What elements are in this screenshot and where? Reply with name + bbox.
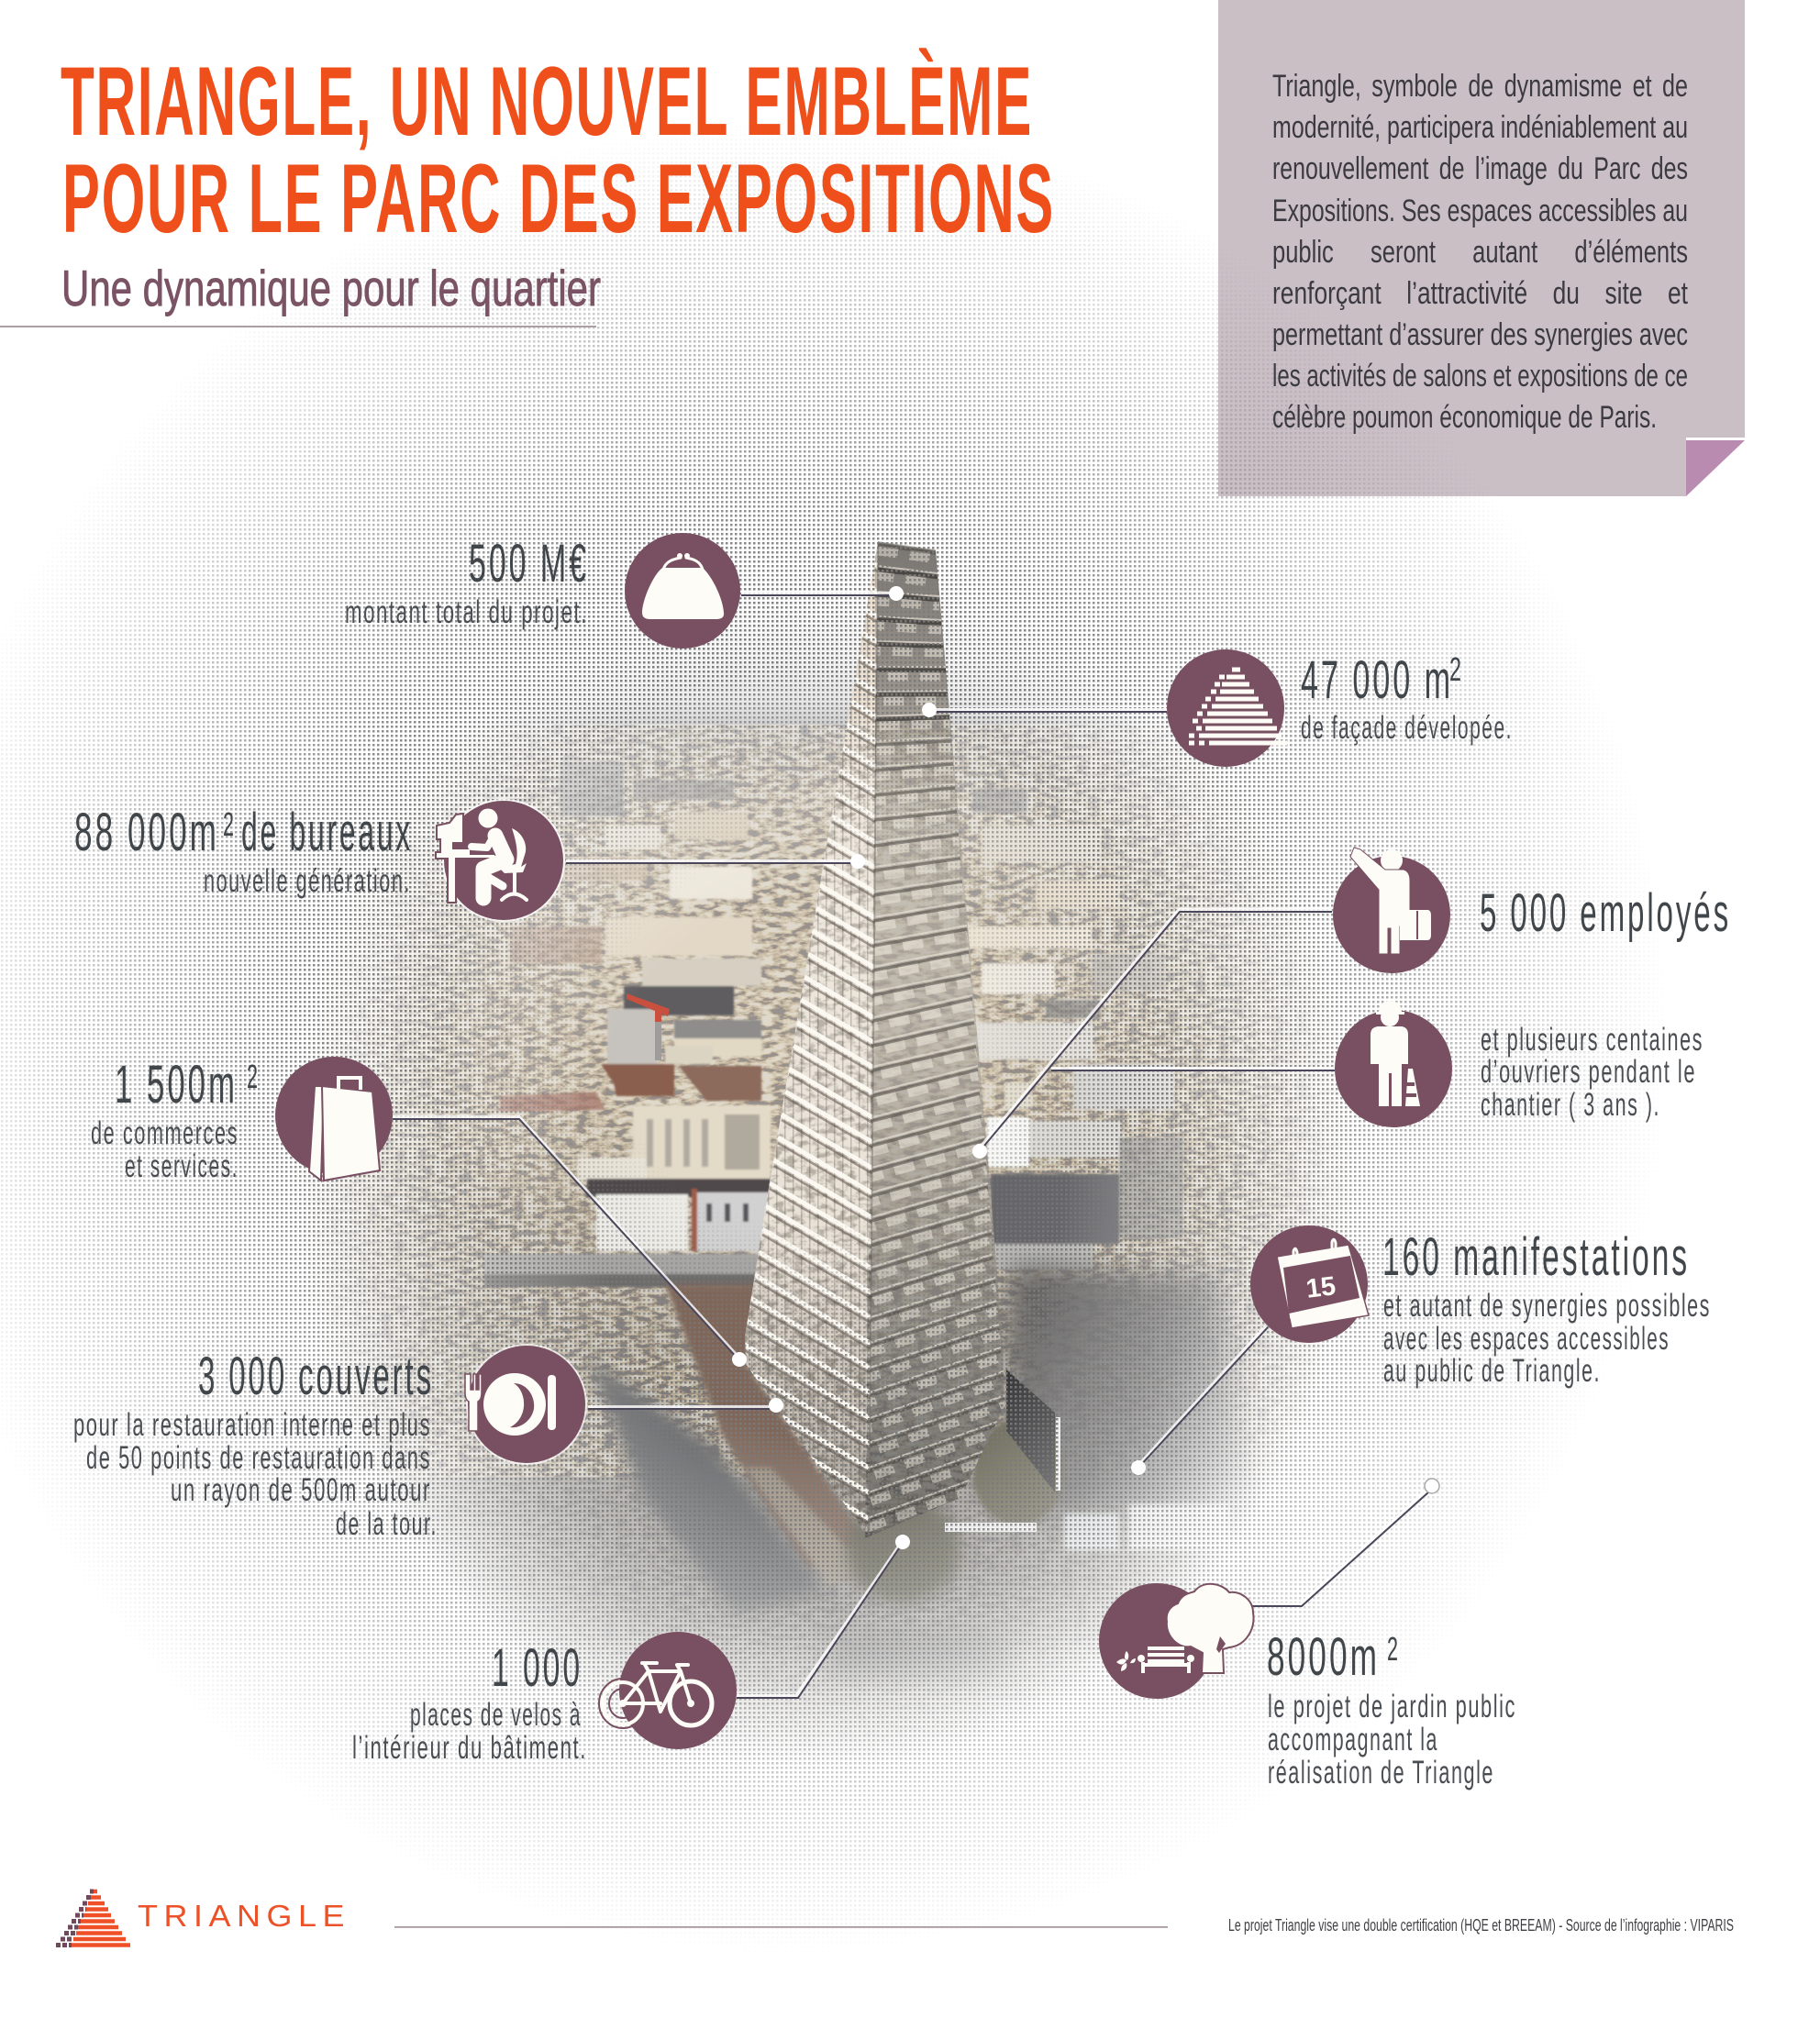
- panel text: introduction: Triangle, symbole de dynamisme et de: [1272, 69, 1688, 104]
- aerial photograph of the district: [312, 635, 1340, 1746]
- callout: 47 000 m2: 47 000 m: [1301, 650, 1453, 710]
- tower: Triangle facade: [745, 541, 1004, 1537]
- callout: 47 000 m2: [922, 649, 1513, 767]
- callout: 1 000 places de velos: l’intérieur du bâtiment.: [352, 1730, 587, 1766]
- icon: purse: [642, 553, 724, 619]
- callout: 1 500 m2 commerces: 2: [247, 1058, 258, 1095]
- subtitle: Une dynamique pour le quartier: [61, 260, 601, 316]
- callout: 8000 m2 jardin public: 8000m: [1267, 1627, 1380, 1687]
- callout: 500 M€: [345, 533, 904, 649]
- callout: 3 000 couverts: 3 000 couverts: [198, 1347, 434, 1406]
- icon: tower stripes: [1189, 670, 1287, 743]
- title: [61, 46, 1055, 253]
- title: POUR LE PARC DES EXPOSITIONS: [62, 143, 1055, 253]
- panel text: introduction: permettant d’assurer des synergies avec: [1272, 317, 1688, 352]
- icon: worker with cone: [1371, 1001, 1420, 1106]
- callout: 1 000 places de velos: places de velos à: [410, 1697, 582, 1733]
- callout: 1 500 m2 commerces: et services.: [125, 1148, 239, 1184]
- icon: person at desk: [436, 809, 527, 903]
- icon: calendar: [1277, 1239, 1369, 1328]
- panel text: introduction: public seront autant d’éléments: [1272, 235, 1688, 270]
- callout: 160 manifestations: au public de Triangle.: [1383, 1353, 1601, 1389]
- callout: 47 000 m2: de façade dévelopée.: [1301, 710, 1513, 746]
- icon: plate and cutlery: [465, 1373, 556, 1436]
- halftone dot screen: [1, 149, 1640, 1924]
- footer rule: [394, 1926, 1168, 1928]
- callout: 88 000 m2 de bureaux: [74, 799, 865, 922]
- logo: Triangle: [56, 1891, 350, 1945]
- construction crane: [627, 993, 670, 1060]
- callout: 88 000 m2 de bureaux: de bureaux: [241, 803, 413, 862]
- callout: 500 M€: 500 M€: [469, 534, 589, 593]
- icon: calendar: 15: [1304, 1271, 1337, 1304]
- callout: 8000 m2 jardin public: [1099, 1479, 1516, 1791]
- callout: 1 000 places de velos: [352, 1535, 910, 1766]
- callout: 3 000 couverts: de 50 points de restauration dans: [86, 1440, 431, 1476]
- callout: 8000 m2 jardin public: 2: [1387, 1630, 1398, 1668]
- callout: 3 000 couverts: un rayon de 500m autour: [171, 1472, 431, 1508]
- callout: ouvriers pendant le chantier: d’ouvriers pendant le: [1481, 1054, 1696, 1090]
- icon: bicycle: [599, 1663, 712, 1728]
- callout: 3 000 couverts: de la tour.: [336, 1506, 438, 1542]
- panel: introduction background: [1218, 0, 1745, 496]
- callout: 88 000 m2 de bureaux: 88 000m: [74, 803, 219, 862]
- callout: 8000 m2 jardin public: accompagnant la: [1268, 1722, 1438, 1757]
- callout: 500 M€: montant total du projet.: [345, 594, 588, 630]
- icon: man with suitcase: [1350, 848, 1431, 954]
- callout: 160 manifestations: [1131, 1225, 1711, 1475]
- callout: ouvriers pendant le chantier: [1051, 1001, 1703, 1127]
- callout: ouvriers pendant le chantier: chantier ( 3 ans ).: [1481, 1087, 1660, 1123]
- icon: tree and bench: [1116, 1584, 1253, 1673]
- callout: 3 000 couverts: [73, 1344, 783, 1542]
- logo: Triangle: TRIANGLE: [138, 1899, 350, 1933]
- panel text: introduction: [1272, 69, 1688, 435]
- callout: 8000 m2 jardin public: le projet de jardin public: [1268, 1689, 1516, 1724]
- callout: 1 000 places de velos: 1 000: [492, 1638, 583, 1698]
- callout: 5 000 employés: [972, 848, 1731, 1159]
- panel text: introduction: renforçant l’attractivité du site et: [1272, 276, 1688, 311]
- callout: 88 000 m2 de bureaux: nouvelle génération.: [204, 863, 411, 899]
- callout: 1 500 m2 commerces: de commerces: [91, 1115, 239, 1151]
- callout: 8000 m2 jardin public: réalisation de Triangle: [1268, 1755, 1494, 1791]
- callout: 88 000 m2 de bureaux: 2: [223, 805, 234, 843]
- callout: 47 000 m2: 2: [1449, 650, 1461, 688]
- callout: 3 000 couverts: pour la restauration interne et plus: [73, 1407, 431, 1443]
- icon: shopping bag: [309, 1078, 380, 1181]
- callout: 1 500 m2 commerces: [91, 1055, 747, 1367]
- callout: 1 500 m2 commerces: 1 500m: [115, 1055, 238, 1114]
- panel text: introduction: célèbre poumon économique de Paris.: [1272, 400, 1657, 435]
- title: TRIANGLE, UN NOUVEL EMBLÈME: [61, 46, 1033, 156]
